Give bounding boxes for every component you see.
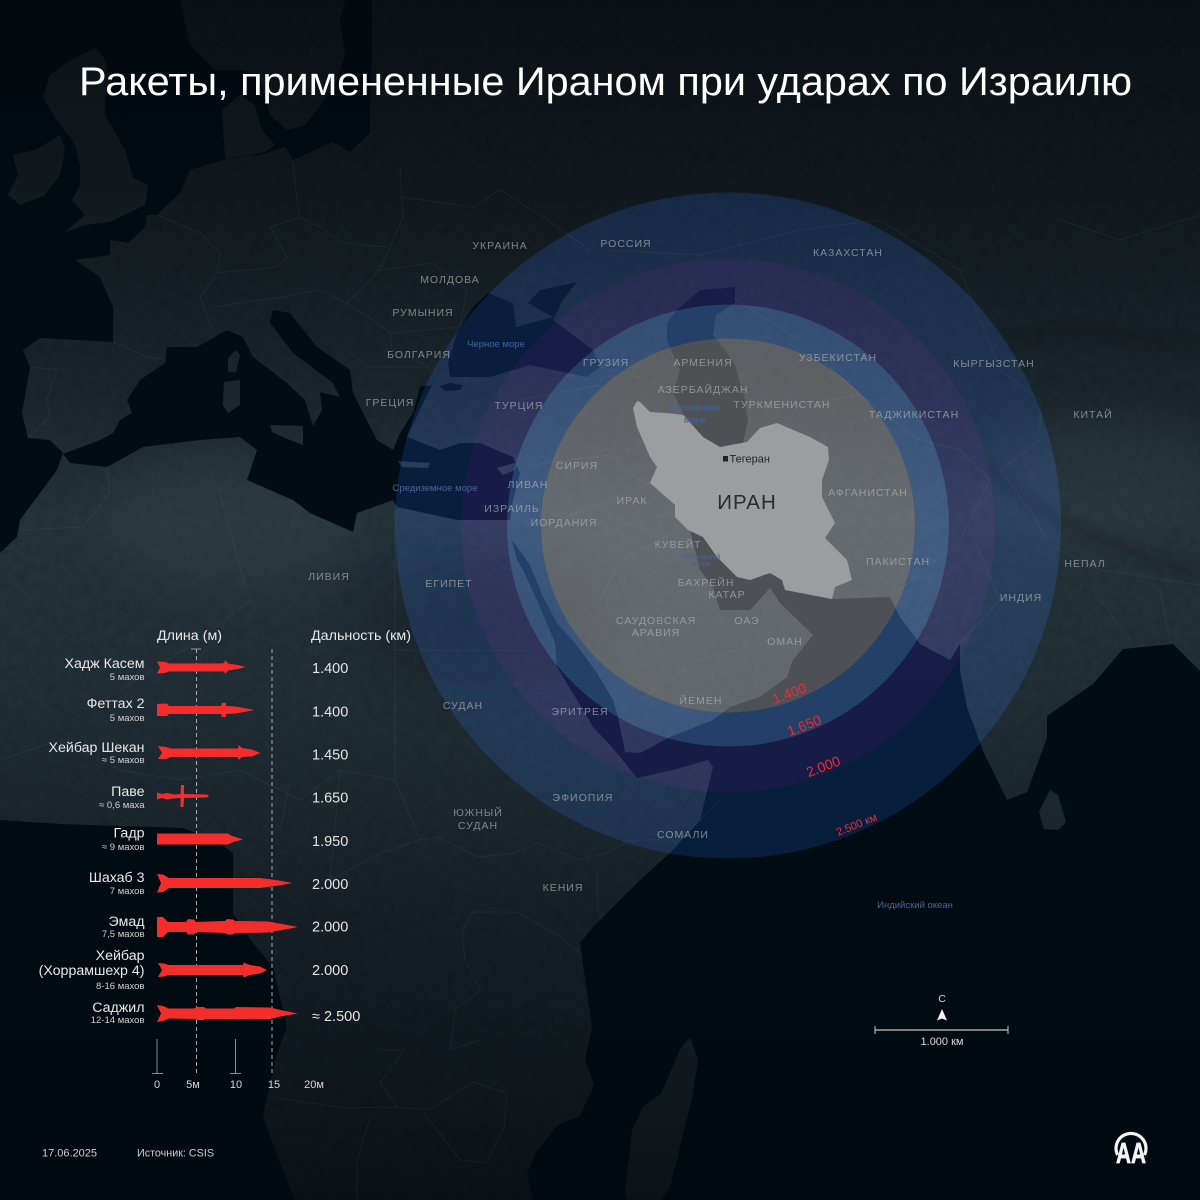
north arrow <box>937 993 947 1020</box>
map labels: countries and seas: КЕНИЯ <box>543 882 583 894</box>
row: Pave: 1.650 <box>312 790 348 806</box>
map labels: countries and seas: ЭФИОПИЯ <box>553 792 613 804</box>
row: Kheibar (Khorramshahr 4) <box>39 948 348 992</box>
map labels: countries and seas: Индийский океан <box>877 900 953 911</box>
island: Madagascar <box>625 1037 698 1200</box>
map labels: countries and seas: КИТАЙ <box>1073 408 1113 421</box>
label: Iran: ИРАН <box>717 491 777 514</box>
map: Iran territory <box>633 401 852 599</box>
row: Sejjil <box>91 1000 360 1026</box>
sea: Caspian <box>667 287 748 447</box>
title: Ракеты, примененные Ираном при ударах по Израилю <box>79 60 1132 104</box>
circle: 1650 km range <box>507 304 949 746</box>
row: Pave: ≈ 0,6 маха <box>99 800 145 811</box>
length axis: 20м <box>304 1079 324 1091</box>
length axis: 15 <box>268 1079 280 1091</box>
map labels: countries and seas: СУДАН <box>458 820 498 832</box>
map labels: countries and seas: ТАДЖИКИСТАН <box>869 409 959 421</box>
row: Kheibar Shekan <box>49 740 348 766</box>
map labels: countries and seas: БОЛГАРИЯ <box>387 349 451 361</box>
island: Denmark <box>222 95 275 158</box>
map labels: countries and seas: Средиземное море <box>393 483 477 494</box>
map labels: countries and seas: АЗЕРБАЙДЖАН <box>658 383 748 396</box>
length axis: 0 <box>154 1079 160 1091</box>
map labels: countries and seas: УЗБЕКИСТАН <box>799 352 877 364</box>
map labels: countries and seas: АРАВИЯ <box>632 627 680 639</box>
map labels: countries and seas: НЕПАЛ <box>1064 558 1106 570</box>
map labels: countries and seas: залив <box>692 561 711 568</box>
row: Ghadr: 1.950 <box>312 834 348 850</box>
map labels: countries and seas: СОМАЛИ <box>657 829 709 841</box>
map labels: countries and seas: ГРУЗИЯ <box>583 357 629 369</box>
map labels: countries and seas: СИРИЯ <box>556 460 598 472</box>
row: Shahab 3: 2.000 <box>312 877 348 893</box>
circle: 1400 km range <box>541 338 915 712</box>
island: Britain <box>43 48 148 232</box>
island: Ireland <box>8 135 65 205</box>
row: Hadj Qasem: 5 махов <box>110 672 144 683</box>
sea: south Atlantic <box>0 820 295 1200</box>
footer: source: Источник: CSIS <box>137 1148 214 1160</box>
label: Tehran with marker: Тегеран <box>730 454 770 466</box>
range label: 2000: 2.000 <box>804 753 843 780</box>
map labels: countries and seas: ТУРЦИЯ <box>495 400 543 412</box>
map labels: countries and seas: КАЗАХСТАН <box>813 247 883 259</box>
length axis: 5м <box>186 1079 200 1091</box>
island: Sri Lanka <box>1039 790 1066 830</box>
map labels: countries and seas: ГРЕЦИЯ <box>366 397 414 409</box>
logo: AA: AA <box>1116 1138 1146 1170</box>
row: Fattah 2: 1.400 <box>312 704 348 720</box>
row: Emad: 2.000 <box>312 920 348 936</box>
map labels: countries and seas: ИРАК <box>617 495 647 507</box>
map labels: countries and seas: Каспийское <box>670 403 720 414</box>
range label: 2500 km: 2.500 км <box>835 812 879 839</box>
map labels: countries and seas: ТУРКМЕНИСТАН <box>734 399 830 411</box>
range label: 1650: 1.650 <box>785 712 824 739</box>
scale bar: 1.000 км <box>921 1036 963 1048</box>
row: Ghadr: Гадр <box>114 826 145 842</box>
map labels: countries and seas: море <box>684 415 706 426</box>
range labels on circles <box>770 680 879 839</box>
sea: north Atlantic and Baltic <box>0 0 372 553</box>
column header: length: Длина (м) <box>157 628 222 643</box>
map labels: countries and seas: БАХРЕЙН <box>678 576 734 589</box>
row: Pave <box>99 784 348 811</box>
row: Hadj Qasem: Хадж Касем <box>65 656 144 672</box>
row: Emad: 7,5 махов <box>102 929 144 940</box>
length axis: 10 <box>230 1079 242 1091</box>
map labels: countries and seas: ПАКИСТАН <box>866 556 930 568</box>
map labels: countries and seas: РУМЫНИЯ <box>392 307 454 319</box>
map labels: countries and seas: Черное море <box>467 339 525 350</box>
sea: Marmara <box>440 383 463 391</box>
map labels: countries and seas: ИНДИЯ <box>1000 592 1042 604</box>
north arrow: С <box>938 993 946 1005</box>
map labels: countries and seas: ЭРИТРЕЯ <box>551 706 609 718</box>
range circles around Iran <box>395 193 1061 859</box>
row: Kheibar Shekan: ≈ 5 махов <box>102 755 144 766</box>
row: Fattah 2 <box>87 696 348 724</box>
map labels: countries and seas: ЮЖНЫЙ <box>453 806 503 819</box>
row: Ghadr <box>102 826 348 853</box>
row: Fattah 2: 5 махов <box>110 713 144 724</box>
map labels: countries and seas: ЙЕМЕН <box>680 694 722 707</box>
map labels: countries and seas: КЫРГЫЗСТАН <box>953 358 1035 370</box>
map labels: countries and seas: КАТАР <box>708 589 746 601</box>
row: Shahab 3 <box>89 870 348 897</box>
map labels: countries and seas: СУДАН <box>443 700 483 712</box>
row: Hadj Qasem <box>65 656 348 683</box>
circle: 2000 km range <box>461 258 995 793</box>
row: Kheibar Shekan: 1.450 <box>312 748 348 764</box>
sea: Indian Ocean, Red Sea, Persian Gulf <box>512 530 1200 1200</box>
map labels: countries and seas: ОАЭ <box>734 615 760 627</box>
map labels: countries and seas: ЕГИПЕТ <box>425 578 473 590</box>
map labels: countries and seas: АРМЕНИЯ <box>673 357 733 369</box>
map labels: countries and seas: ЛИВАН <box>508 479 548 491</box>
row: Emad <box>102 914 348 940</box>
row: Emad: Эмад <box>109 914 145 930</box>
map labels: countries and seas: УКРАИНА <box>472 240 528 252</box>
map labels: countries and seas: МОЛДОВА <box>420 274 480 286</box>
row: Kheibar Shekan: Хейбар Шекан <box>49 740 144 756</box>
map labels: countries and seas: ИОРДАНИЯ <box>531 517 597 529</box>
row: Pave: Паве <box>111 784 145 800</box>
row: Sejjil: Саджил <box>92 1000 144 1016</box>
range label: 1400: 1.400 <box>770 680 809 707</box>
row: Kheibar (Khorramshahr 4): Хейбар <box>96 948 145 964</box>
length axis <box>152 649 324 1091</box>
row: Kheibar (Khorramshahr 4): 2.000 <box>312 963 348 979</box>
footer: date: 17.06.2025 <box>42 1148 97 1160</box>
map labels: countries and seas: ИЗРАИЛЬ <box>484 503 540 515</box>
row: Sejjil: ≈ 2.500 <box>312 1009 360 1025</box>
map labels: countries and seas: АФГАНИСТАН <box>828 487 908 499</box>
scale bar <box>875 1026 1008 1048</box>
map labels: countries and seas: Персидский <box>682 553 720 561</box>
map labels: countries and seas: ЛИВИЯ <box>308 571 350 583</box>
map labels: countries and seas: САУДОВСКАЯ <box>616 615 696 627</box>
row: Shahab 3: Шахаб 3 <box>89 870 145 886</box>
row: Shahab 3: 7 махов <box>110 886 144 897</box>
map labels: countries and seas: КУВЕЙТ <box>655 538 701 551</box>
row: Ghadr: ≈ 9 махов <box>102 842 144 853</box>
map labels: countries and seas: ОМАН <box>767 636 803 648</box>
circle: 2500 km range <box>395 193 1061 859</box>
missile table <box>39 628 411 1091</box>
row: Fattah 2: Феттах 2 <box>87 696 145 712</box>
column header: range: Дальность (км) <box>311 628 411 643</box>
row: Kheibar (Khorramshahr 4): (Хоррамшехр 4) <box>39 963 144 979</box>
row: Hadj Qasem: 1.400 <box>312 661 348 677</box>
row: Kheibar (Khorramshahr 4): 8-16 махов <box>96 981 144 992</box>
sea: Black Sea <box>448 282 600 377</box>
map labels: countries and seas <box>308 238 1113 911</box>
sea: Mediterranean <box>63 310 520 532</box>
map labels: countries and seas: РОССИЯ <box>600 238 652 250</box>
row: Sejjil: 12-14 махов <box>91 1015 144 1026</box>
logo: AA <box>1116 1133 1146 1170</box>
